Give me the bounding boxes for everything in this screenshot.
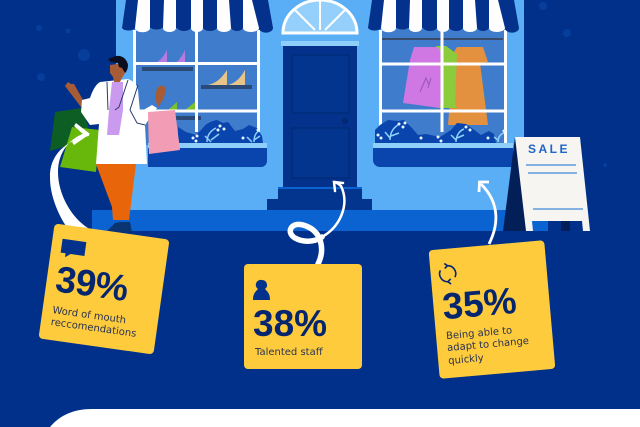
label word of mouth: reccomendations	[50, 317, 137, 340]
plants right	[375, 120, 506, 143]
background dots	[36, 2, 607, 167]
shopper figure	[50, 56, 180, 232]
left window	[133, 28, 263, 145]
pink bag	[148, 110, 180, 154]
right planter	[373, 143, 513, 167]
coat	[81, 79, 157, 164]
door steps	[267, 187, 372, 210]
stat 38%: 38%	[253, 303, 327, 344]
card: talented staff	[244, 264, 362, 369]
shoes left window	[142, 50, 252, 120]
right awning	[368, 0, 519, 33]
label adapt: Being able to	[446, 325, 513, 342]
icon: refresh	[439, 263, 457, 285]
legs	[96, 164, 136, 220]
label word of mouth: Word of mouth	[52, 305, 127, 326]
hands	[65, 82, 166, 107]
clothes	[403, 46, 488, 125]
light green bag	[60, 127, 100, 172]
stat 35%: 35%	[441, 280, 518, 327]
arrow to shop from word of mouth	[50, 123, 90, 228]
icon: speech bubble	[60, 239, 86, 260]
label talented staff: Talented staff	[254, 347, 324, 358]
dark green bag	[50, 108, 92, 151]
stat 39%: 39%	[53, 258, 131, 309]
door	[281, 41, 359, 187]
coat lines	[107, 80, 145, 125]
hair	[108, 56, 128, 73]
left awning	[122, 0, 273, 33]
pavement	[92, 210, 548, 231]
right window	[375, 28, 507, 145]
arched fanlight	[283, 0, 357, 33]
left planter	[148, 143, 267, 167]
shoes	[107, 222, 132, 232]
sale sign: SALE	[528, 142, 570, 156]
plants left	[178, 120, 263, 143]
arrow to door	[290, 182, 344, 264]
white panel	[50, 409, 640, 427]
storefront	[92, 0, 548, 231]
label adapt: quickly	[448, 353, 484, 367]
arrow to window	[479, 182, 496, 244]
card: word of mouth	[38, 223, 170, 355]
label adapt: adapt to change	[447, 336, 529, 354]
icon: person	[253, 280, 270, 300]
shirt	[107, 82, 123, 135]
head	[110, 63, 125, 82]
sale sign	[503, 137, 590, 231]
shop wall	[116, 0, 524, 210]
card: adapt to change	[429, 240, 555, 379]
